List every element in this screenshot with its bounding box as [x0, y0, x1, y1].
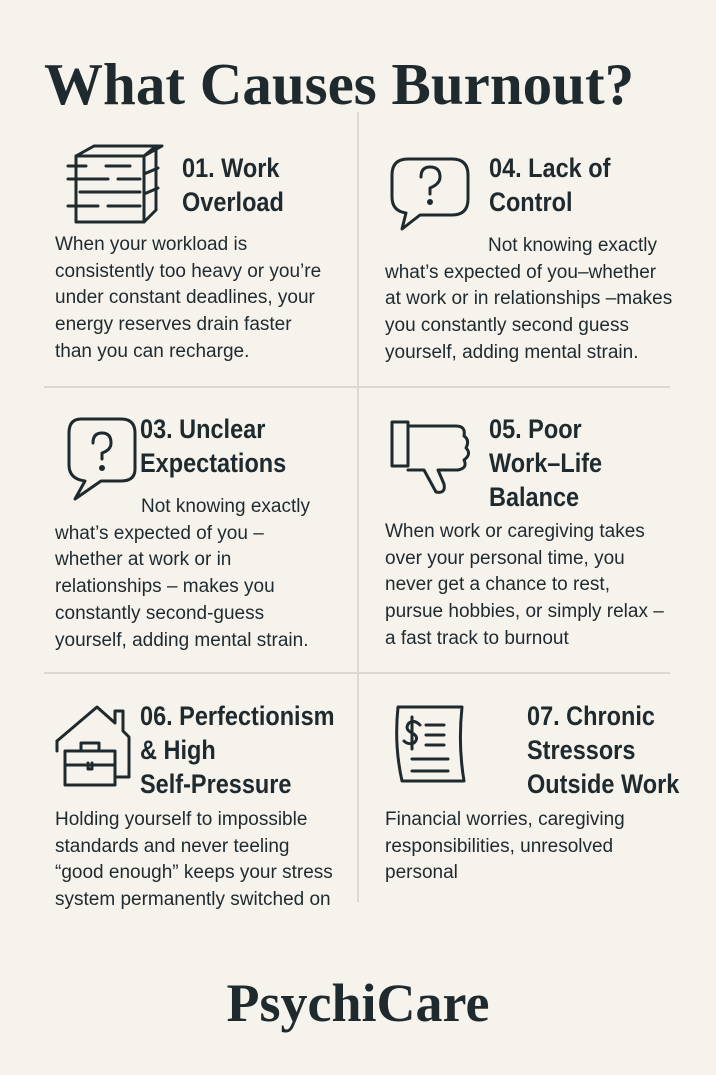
heading: 01. Work	[182, 153, 279, 183]
icon: bill document	[395, 706, 466, 782]
heading: Outside Work	[527, 769, 679, 799]
heading: Expectations	[140, 448, 286, 478]
text: what’s expected of you–whether	[385, 262, 656, 283]
text	[385, 521, 664, 649]
text: than you can recharge.	[55, 341, 249, 362]
heading: Balance	[489, 482, 579, 512]
text: Not knowing exactly	[488, 235, 657, 256]
text: consistently too heavy or you’re	[55, 261, 321, 282]
text: system permanently switched on	[55, 889, 331, 910]
icon: thumbs down	[390, 420, 470, 494]
text: yourself, adding mental strain.	[385, 342, 638, 363]
icon: stacked papers	[66, 144, 164, 224]
text: over your personal time, you	[385, 548, 625, 569]
text: whether at work or in	[55, 549, 231, 570]
text: Financial worries, caregiving	[385, 809, 625, 830]
panel: chronic stressors	[385, 701, 680, 883]
text: Not knowing exactly	[141, 496, 310, 517]
text	[385, 809, 625, 883]
text	[55, 496, 310, 651]
text	[385, 235, 672, 363]
text: energy reserves drain faster	[55, 314, 292, 335]
title: What Causes Burnout?	[44, 51, 634, 117]
text: responsibilities, unresolved	[385, 836, 613, 857]
heading	[182, 153, 284, 217]
text: yourself, adding mental strain.	[55, 630, 308, 651]
icon: house with briefcase	[55, 706, 130, 786]
text: Holding yourself to impossible	[55, 809, 307, 830]
icon: speech bubble question	[68, 418, 136, 501]
heading: 05. Poor	[489, 414, 582, 444]
heading	[489, 153, 610, 217]
heading: Stressors	[527, 735, 635, 765]
text: a fast track to burnout	[385, 628, 569, 649]
heading	[527, 701, 680, 799]
text: pursue hobbies, or simply relax –	[385, 601, 664, 622]
text: never get a chance to rest,	[385, 574, 610, 595]
text: When your workload is	[55, 234, 247, 255]
heading: 04. Lack of	[489, 153, 610, 183]
text: what’s expected of you –	[55, 523, 264, 544]
text	[55, 809, 333, 910]
heading: & High	[140, 735, 216, 765]
heading: 07. Chronic	[527, 701, 655, 731]
heading: Self-Pressure	[140, 769, 291, 799]
panel: perfectionism	[55, 701, 335, 910]
text: at work or in relationships –makes	[385, 288, 672, 309]
heading	[140, 414, 286, 478]
icon: speech bubble question	[390, 158, 470, 231]
heading: Overload	[182, 187, 284, 217]
text: constantly second-guess	[55, 603, 264, 624]
text	[55, 234, 321, 362]
panel: work overload	[55, 144, 321, 362]
panel: poor work-life balance	[385, 414, 664, 649]
text: standards and never teeling	[55, 836, 290, 857]
text: “good enough” keeps your stress	[55, 862, 333, 883]
heading: Control	[489, 187, 573, 217]
footer logo: PsychiCare	[227, 973, 489, 1033]
text: you constantly second guess	[385, 315, 629, 336]
text: relationships – makes you	[55, 576, 275, 597]
heading: 03. Unclear	[140, 414, 265, 444]
text: personal	[385, 862, 458, 883]
text: under constant deadlines, your	[55, 287, 315, 308]
heading: 06. Perfectionism	[140, 701, 335, 731]
heading: Work–Life	[489, 448, 602, 478]
heading	[489, 414, 602, 512]
text: When work or caregiving takes	[385, 521, 645, 542]
panel: lack of control	[385, 153, 672, 363]
panel: unclear expectations	[55, 414, 310, 651]
heading	[140, 701, 335, 799]
